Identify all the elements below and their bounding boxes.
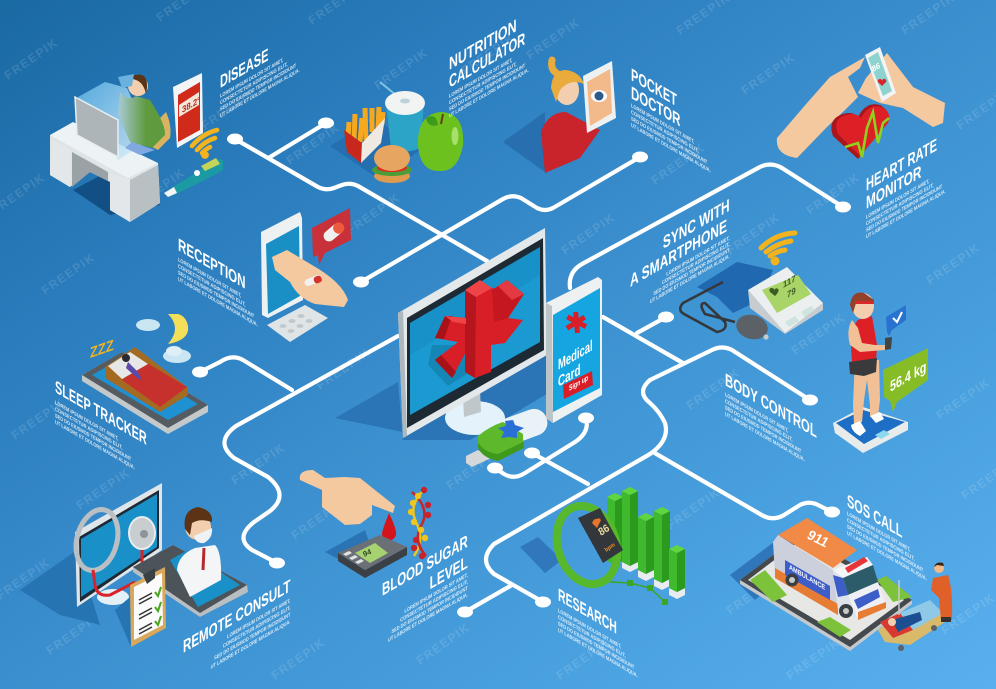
panel: body control <box>833 292 928 453</box>
text: sync with a smartphone: SED DO EIUSMOD TEMPOR INCIDIDUNT <box>653 247 730 298</box>
text: nutrition calculator: LOREM IPSUM DOLOR SIT AMET, <box>449 57 513 100</box>
hand with pill <box>272 250 348 307</box>
watermarks: FREEPIK <box>344 190 403 237</box>
text: sleep tracker: UT LABORE ET DOLORE MAGNA ALIQUA. <box>55 419 135 472</box>
text: sleep tracker <box>55 376 147 479</box>
blood pressure cuff <box>697 262 773 313</box>
text: blood sugar level: SED DO EIUSMOD TEMPOR INCIDIDUNT <box>392 585 468 636</box>
speech bubble: check <box>886 305 906 336</box>
text: research: RESEARCH <box>558 584 617 638</box>
text: sleep tracker: CONSECTETUR ADIPISCING ELIT, <box>55 406 123 452</box>
watermarks: FREEPIK <box>199 85 258 132</box>
watermarks: FREEPIK <box>804 170 863 217</box>
text: nutrition calculator: SED DO EIUSMOD TEMPOR INCIDIDUNT <box>449 63 526 113</box>
watermarks: FREEPIK <box>289 495 348 542</box>
watermarks: FREEPIK <box>554 635 613 682</box>
watermarks: FREEPIK <box>924 240 983 287</box>
fitness band: 86 <box>597 523 612 539</box>
text: sos call <box>847 490 927 583</box>
text: blood sugar level: BLOOD SUGAR <box>382 530 468 600</box>
watermarks: FREEPIK <box>372 45 431 92</box>
watermarks: FREEPIK <box>74 465 133 512</box>
text: pocket doctor <box>631 64 711 175</box>
phone <box>82 352 208 434</box>
text: heart rate monitor: HEART RATE <box>866 134 937 195</box>
monitor <box>75 483 162 607</box>
tablet: eye scan <box>583 61 616 133</box>
text: heart rate monitor <box>866 129 946 241</box>
tube <box>680 282 735 332</box>
watermarks: FREEPIK <box>284 120 343 167</box>
stretcher <box>878 580 945 651</box>
text: medical card <box>558 337 593 391</box>
text: nutrition calculator: UT LABORE ET DOLORE MAGNA ALIQUA. <box>449 67 529 120</box>
text: reception: UT LABORE ET DOLORE MAGNA ALIQUA. <box>178 276 258 329</box>
text: sync with a smartphone: A SMARTPHONE <box>630 215 727 291</box>
tablet <box>173 73 203 148</box>
watermarks: FREEPIK <box>559 210 618 257</box>
text: body control: SED DO EIUSMOD TEMPOR INCIDIDUNT <box>725 405 802 455</box>
watermarks: FREEPIK <box>44 610 103 657</box>
text: body control: LOREM IPSUM DOLOR SIT AMET, <box>725 392 789 435</box>
panel: sleep tracker <box>82 314 208 434</box>
panel: remote consult <box>20 483 248 647</box>
text: nutrition calculator <box>449 8 529 120</box>
tablet: 38.2° <box>182 94 201 115</box>
text: research: CONSECTETUR ADIPISCING ELIT, <box>558 614 626 660</box>
stethoscope <box>70 505 155 595</box>
connector end dots <box>192 118 851 618</box>
icon: zzz: ZZZ <box>90 337 114 362</box>
text: reception: LOREM IPSUM DOLOR SIT AMET, <box>178 257 242 300</box>
watermarks: FREEPIK <box>269 635 328 682</box>
monitor device <box>748 267 823 334</box>
icon: wifi <box>192 130 217 157</box>
panel: disease <box>50 73 223 222</box>
bar chart <box>607 487 685 599</box>
text: remote consult: LOREM IPSUM DOLOR SIT AMET, <box>227 598 291 641</box>
icon: fries <box>344 107 385 163</box>
watermarks: FREEPIK <box>934 375 993 422</box>
desk <box>50 122 160 222</box>
text: sos call: UT LABORE ET DOLORE MAGNA ALIQUA. <box>847 530 927 583</box>
text: disease: DISEASE <box>220 44 268 92</box>
text: reception: SED DO EIUSMOD TEMPOR INCIDIDUNT <box>178 270 255 320</box>
watermarks: FREEPIK <box>129 165 188 212</box>
phone: 86 <box>871 61 882 74</box>
icon: wifi <box>761 233 795 263</box>
doctor <box>177 507 221 597</box>
text: sos call: LOREM IPSUM DOLOR SIT AMET, <box>847 511 911 554</box>
text: research: LOREM IPSUM DOLOR SIT AMET, <box>558 608 622 651</box>
icon: usb stick <box>466 405 551 467</box>
text: remote consult: REMOTE CONSULT <box>183 575 291 657</box>
text: blood sugar level: UT LABORE ET DOLORE MAGNA ALIQUA. <box>388 592 468 644</box>
text: research <box>558 584 638 680</box>
watermarks: FREEPIK <box>724 210 783 257</box>
text: blood sugar level <box>382 530 468 648</box>
text: sos call: SED DO EIUSMOD TEMPOR INCIDIDUNT <box>847 524 924 574</box>
text: heart rate monitor: UT LABORE ET DOLORE MAGNA ALIQUA. <box>866 188 946 241</box>
panel: pocket doctor <box>503 60 616 173</box>
watermarks: FREEPIK <box>524 15 583 62</box>
panel: nutrition calculator <box>330 82 463 183</box>
text: heart rate monitor: SED DO EIUSMOD TEMPOR INCIDIDUNT <box>866 184 943 234</box>
text: heart rate monitor: LOREM IPSUM DOLOR SIT AMET, <box>866 178 930 221</box>
text: sync with a smartphone: SYNC WITH <box>663 194 730 253</box>
icon: soft drink <box>380 82 425 152</box>
clipboard <box>115 567 166 647</box>
text: pocket doctor: POCKET <box>631 64 677 111</box>
panel: medical card phone <box>546 277 602 423</box>
tablet base <box>740 533 912 651</box>
text: pocket doctor: SED DO EIUSMOD TEMPOR INCIDIDUNT <box>631 116 708 166</box>
ambulance: 911 <box>804 527 832 550</box>
text: body control: UT LABORE ET DOLORE MAGNA ALIQUA. <box>725 411 805 464</box>
text: remote consult: SED DO EIUSMOD TEMPOR INCIDIDUNT <box>214 612 291 662</box>
watermarks: FREEPIK <box>459 30 518 77</box>
text: blood sugar level: LEVEL <box>430 551 468 594</box>
watermarks: FREEPIK <box>649 140 708 187</box>
text: sleep tracker: SED DO EIUSMOD TEMPOR INCIDIDUNT <box>55 413 132 463</box>
panel: heart rate monitor <box>777 47 945 159</box>
text: nutrition calculator: NUTRITION <box>449 15 517 74</box>
blood drop <box>382 513 396 540</box>
panel: blood sugar level <box>300 470 431 578</box>
icon: apple <box>418 112 463 171</box>
text: disease: LOREM IPSUM DOLOR SIT AMET, <box>220 57 284 100</box>
ambulance <box>773 518 886 620</box>
watermarks: FREEPIK <box>314 345 373 392</box>
icon: moon and clouds <box>136 314 191 363</box>
speech bubble: weight: 56.4 kg <box>890 358 926 396</box>
woman <box>848 292 892 436</box>
text: sync with a smartphone <box>630 194 730 317</box>
panel: sync with a smartphone device <box>680 233 823 343</box>
text: sync with a smartphone: CONSECTETUR ADIPISCING ELIT, <box>662 241 730 287</box>
glucose meter: 94 <box>362 546 373 559</box>
text: research: UT LABORE ET DOLORE MAGNA ALIQUA. <box>558 627 638 680</box>
text: disease: SED DO EIUSMOD TEMPOR INCIDIDUNT <box>220 63 297 113</box>
text: pocket doctor: UT LABORE ET DOLORE MAGNA ALIQUA. <box>631 122 711 175</box>
text: blood sugar level: LOREM IPSUM DOLOR SIT AMET, <box>405 572 468 615</box>
monitor device: 79 <box>787 285 796 300</box>
speech bubble: pill <box>312 208 351 265</box>
text: sleep tracker: SLEEP TRACKER <box>55 376 147 449</box>
ambulance: AMBULANCE <box>789 564 825 592</box>
watermarks: FREEPIK <box>2 35 61 82</box>
watermarks: FREEPIK <box>414 620 473 667</box>
person <box>78 74 170 160</box>
text: pocket doctor: LOREM IPSUM DOLOR SIT AMET, <box>631 103 695 146</box>
text: body control: CONSECTETUR ADIPISCING ELIT, <box>725 398 793 444</box>
monitor device: 117 <box>783 273 796 290</box>
icon: burger <box>372 145 412 183</box>
text: heart rate monitor: CONSECTETUR ADIPISCING ELIT, <box>866 182 934 228</box>
watermarks: FREEPIK <box>739 50 798 97</box>
icon: small red star <box>566 312 587 333</box>
text: body control: BODY CONTROL <box>725 369 817 442</box>
icon: heart with pulse <box>831 104 889 159</box>
text: blood sugar level: CONSECTETUR ADIPISCING ELIT, <box>400 579 468 624</box>
phone <box>133 545 248 617</box>
panel: sos call <box>730 518 952 651</box>
watermarks: FREEPIK <box>724 570 783 617</box>
paramedic <box>931 562 952 622</box>
watermarks: FREEPIK <box>664 485 723 532</box>
speech bubble: weight <box>883 348 928 412</box>
button: sign up <box>563 371 593 399</box>
text: sleep tracker: LOREM IPSUM DOLOR SIT AMET, <box>55 400 119 443</box>
dna helix <box>408 487 431 559</box>
bulb <box>733 311 771 343</box>
icon: red medical star <box>428 280 524 386</box>
text: disease <box>220 26 300 120</box>
watermarks: FREEPIK <box>9 395 68 442</box>
text: sos call: SOS CALL <box>847 490 903 542</box>
text: research: SED DO EIUSMOD TEMPOR INCIDIDUNT <box>558 621 635 671</box>
bathroom scale <box>833 407 908 453</box>
text: nutrition calculator: CONSECTETUR ADIPISCING ELIT, <box>449 61 517 107</box>
watermarks: FREEPIK <box>444 445 503 492</box>
text: sync with a smartphone: UT LABORE ET DOLORE MAGNA ALIQUA. <box>650 253 730 306</box>
text: remote consult: CONSECTETUR ADIPISCING ELIT, <box>223 605 291 650</box>
panel: reception <box>261 208 351 342</box>
connector lines <box>200 123 843 612</box>
text: sos call: CONSECTETUR ADIPISCING ELIT, <box>847 517 915 563</box>
watermarks: FREEPIK <box>784 635 843 682</box>
text: reception: RECEPTION <box>178 234 246 293</box>
text: remote consult <box>183 575 291 687</box>
fitness band <box>547 498 627 592</box>
watermarks: FREEPIK <box>684 365 743 412</box>
text: reception <box>178 234 258 329</box>
text: medical card: Medical <box>558 337 593 374</box>
bed <box>105 347 188 412</box>
text: pocket doctor: DOCTOR <box>631 82 681 131</box>
watermarks: FREEPIK <box>789 310 848 357</box>
network line <box>610 580 668 605</box>
desktop monitor <box>75 97 118 157</box>
phone <box>261 212 303 318</box>
text: reception: CONSECTETUR ADIPISCING ELIT, <box>178 263 246 309</box>
watermarks: FREEPIK <box>39 250 98 297</box>
button: sign up: Sign up <box>569 373 588 393</box>
text: pocket doctor: CONSECTETUR ADIPISCING ELIT, <box>631 109 699 155</box>
text: disease: UT LABORE ET DOLORE MAGNA ALIQUA. <box>220 67 300 120</box>
hand pointing <box>300 470 395 525</box>
panel: research <box>520 487 685 605</box>
fitness band: bpm <box>604 542 617 554</box>
text: heart rate monitor: MONITOR <box>866 161 922 213</box>
text: sync with a smartphone: LOREM IPSUM DOLOR SIT AMET, <box>666 235 730 278</box>
hand right <box>858 53 945 127</box>
text: body control <box>725 369 817 471</box>
figure: woman <box>541 60 600 173</box>
text: disease: CONSECTETUR ADIPISCING ELIT, <box>220 61 288 107</box>
text: nutrition calculator: CALCULATOR <box>449 28 525 92</box>
panel: central monitor <box>335 228 550 440</box>
phone <box>865 47 896 102</box>
text: medical card: Card <box>558 361 581 391</box>
text: remote consult: UT LABORE ET DOLORE MAGNA ALIQUA. <box>211 619 291 671</box>
blister pack <box>267 305 328 342</box>
hand left <box>777 57 865 158</box>
icon: thermometer <box>164 158 223 197</box>
watermarks: FREEPIK <box>229 440 288 487</box>
